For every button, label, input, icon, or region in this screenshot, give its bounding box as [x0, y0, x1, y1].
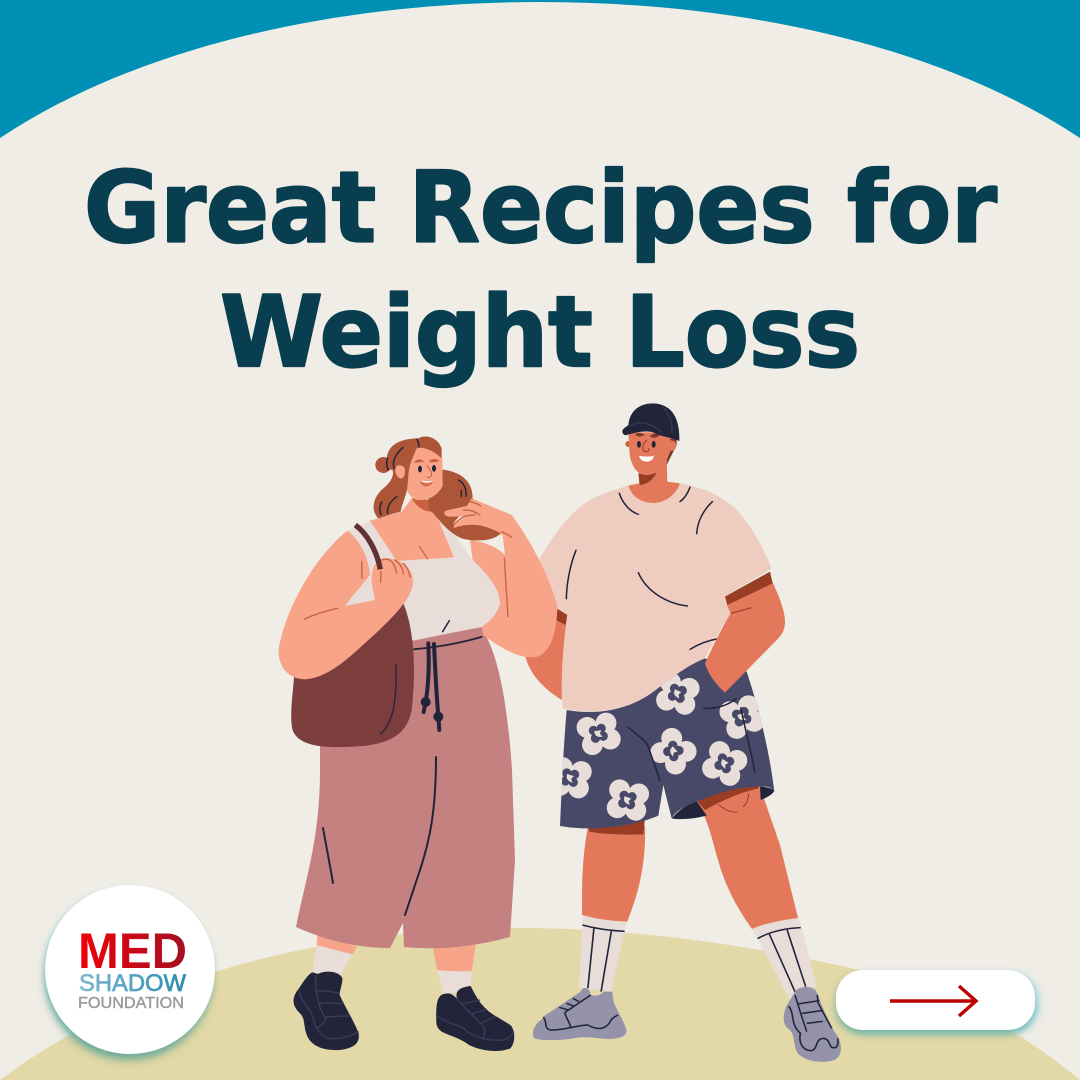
man legs: [582, 787, 798, 929]
chest: [370, 498, 454, 561]
shorts flowers: [547, 670, 768, 823]
woman hair back: [427, 469, 501, 540]
man neck: [628, 462, 680, 503]
woman skirt: [296, 627, 515, 948]
shorts: [672, 801, 707, 819]
title: Great Recipes for: [84, 152, 998, 266]
leg shadows: [588, 818, 645, 835]
woman face: [402, 448, 443, 500]
title: Weight Loss: [220, 276, 860, 390]
waist tie: [413, 637, 482, 649]
shirt: [533, 483, 772, 711]
illustration: man: [525, 403, 841, 1062]
woman ear: [395, 465, 405, 479]
back arm: [525, 608, 567, 700]
arm holding bag: [279, 531, 413, 679]
bag: [291, 603, 414, 747]
arrow icon: [890, 986, 976, 1016]
logo wordmark: [78, 923, 187, 1012]
woman calves, socks and shoes: [294, 935, 514, 1051]
logo wordmark: FOUNDATION: [78, 995, 184, 1012]
logo wordmark: MED: [78, 923, 187, 979]
ground hill: [0, 928, 1080, 1080]
top blue arc: [0, 0, 1080, 138]
man head: [667, 438, 677, 465]
bag strap: [355, 525, 380, 569]
right arm: [470, 498, 557, 657]
title: [84, 152, 998, 390]
woman fingers: [444, 498, 512, 535]
woman upper body: [279, 436, 557, 747]
logo wordmark: SHADOW: [79, 970, 186, 997]
illustration: woman: [279, 436, 557, 1051]
white top: [345, 519, 500, 641]
woman hair front: [375, 457, 391, 473]
man cap: [622, 403, 679, 441]
logo badge: [45, 885, 215, 1054]
next button: [836, 970, 1035, 1030]
man upper body: [525, 403, 785, 835]
man socks and sneakers: [533, 915, 841, 1062]
man arm: [705, 582, 785, 693]
